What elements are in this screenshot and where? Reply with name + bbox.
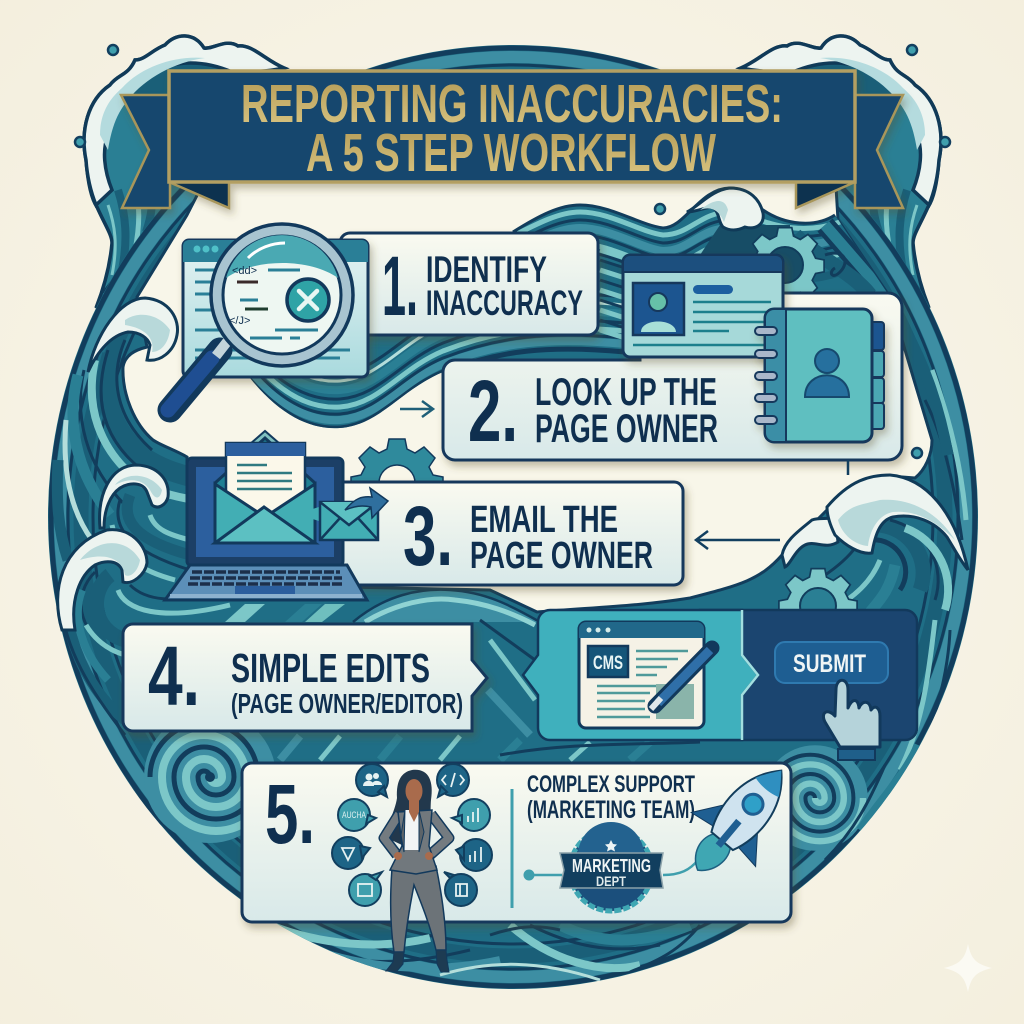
- divider: [510, 789, 514, 908]
- button: submit: [775, 642, 888, 683]
- bottom wave bands: [250, 925, 700, 980]
- step text: PAGE OWNER: [470, 535, 653, 577]
- trousers: [391, 866, 446, 952]
- skill bubbles: [332, 764, 492, 906]
- marketing dept badge: DEPT: [596, 873, 626, 889]
- step text: EMAIL THE: [470, 499, 618, 541]
- step 2 card: [443, 293, 902, 460]
- code tags: </J>: [229, 315, 250, 327]
- right small foam: [782, 517, 838, 567]
- left foam 2: [100, 465, 168, 528]
- step text: INACCURACY: [426, 284, 583, 323]
- icon: pointing hand: [823, 680, 880, 760]
- step number: 3.: [403, 489, 453, 583]
- step text: IDENTIFY: [426, 249, 547, 290]
- step number: 1.: [382, 239, 418, 333]
- icon: CMS window: [579, 622, 704, 728]
- central wave body: [250, 206, 886, 428]
- step text: SIMPLE EDITS: [231, 645, 430, 691]
- step text: (MARKETING TEAM): [527, 796, 695, 824]
- CMS and submit panel: [523, 610, 917, 760]
- wave foam: [58, 188, 968, 630]
- icon: pen: [651, 648, 712, 709]
- crest 2 wave: [127, 495, 190, 555]
- top corner crests: [84, 36, 941, 308]
- neck: [409, 800, 419, 822]
- right side wave bands: [824, 342, 968, 860]
- connector to badge: [524, 860, 698, 880]
- card panel: [443, 293, 902, 460]
- title text: A 5 STEP WORKFLOW: [306, 123, 716, 183]
- step 1 card: [340, 233, 598, 335]
- icon: CMS window: CMS: [593, 653, 623, 674]
- left side wave bands: [57, 340, 230, 825]
- background gear right: [779, 569, 857, 624]
- step 5 card: [242, 763, 791, 922]
- title banner: [121, 71, 903, 208]
- icon: profile window: [623, 255, 783, 357]
- shoes: [386, 950, 449, 972]
- icon: error badge: [287, 279, 329, 321]
- center foam: [687, 188, 763, 230]
- background curl: [825, 253, 845, 275]
- hands: [394, 852, 433, 860]
- lapels: [401, 810, 424, 852]
- left foam 1: [88, 298, 178, 372]
- face: [406, 779, 422, 803]
- right big foam: [827, 475, 968, 570]
- card panel: [123, 624, 487, 731]
- teal panel: [523, 610, 758, 740]
- step text: PAGE OWNER: [535, 407, 718, 451]
- connector arrow 1 to 2: [400, 401, 433, 417]
- step text: [231, 645, 463, 719]
- card panel: [242, 763, 791, 922]
- ribbon panel: [169, 71, 855, 182]
- foam shading: [80, 201, 955, 576]
- step 3 card: [335, 482, 683, 585]
- gear above step 3: [351, 439, 443, 483]
- step 4 card: [123, 624, 487, 731]
- marketing dept badge: MARKETING: [572, 856, 651, 876]
- foam bubbles: [75, 45, 950, 458]
- step text: [470, 499, 653, 577]
- rocket: [666, 744, 813, 897]
- step text: LOOK UP THE: [535, 371, 717, 414]
- step text: [527, 771, 695, 824]
- code tags: <dd>: [232, 265, 257, 277]
- hair: [387, 770, 432, 845]
- connector line 2 to 3: [696, 460, 848, 549]
- step text: [426, 249, 583, 323]
- button: submit: SUBMIT: [793, 650, 866, 678]
- title text: [241, 74, 783, 183]
- step number: 4.: [148, 629, 200, 723]
- marketing dept badge: [560, 822, 663, 911]
- left foam 3: [58, 530, 147, 630]
- icon: address book: [755, 309, 884, 442]
- code tags: [229, 265, 257, 327]
- step number: 2.: [468, 363, 518, 460]
- background gear top right: [746, 228, 824, 304]
- step 3 to 4 stripes: [225, 590, 540, 625]
- jacket: [390, 810, 437, 874]
- swirl right: [777, 745, 868, 851]
- woman in grey suit: [384, 770, 449, 972]
- icon: magnifying glass: [168, 224, 353, 410]
- icon: code window: [183, 240, 368, 377]
- skill bubbles: AUCHA: [342, 810, 366, 820]
- ribbon tails: [121, 95, 903, 208]
- blouse: [404, 810, 420, 850]
- gap stripes around step 4: [280, 620, 700, 760]
- step number: 5.: [265, 767, 315, 861]
- step text: (PAGE OWNER/EDITOR): [231, 688, 463, 719]
- small envelope and arrow: [297, 488, 388, 540]
- icon: laptop with envelope: [165, 431, 388, 600]
- card panel: [335, 482, 683, 585]
- envelope with letter: [215, 431, 315, 543]
- step text: [535, 371, 718, 451]
- cream interior: [123, 170, 932, 612]
- navy panel: [700, 610, 917, 740]
- crest 3 wave: [96, 575, 125, 640]
- step text: COMPLEX SUPPORT: [527, 771, 695, 798]
- arms: [384, 814, 449, 855]
- card panel: [340, 233, 598, 335]
- swirl left: [144, 732, 274, 843]
- title text: REPORTING INACCURACIES:: [241, 74, 783, 134]
- sparkle watermark: [944, 944, 992, 992]
